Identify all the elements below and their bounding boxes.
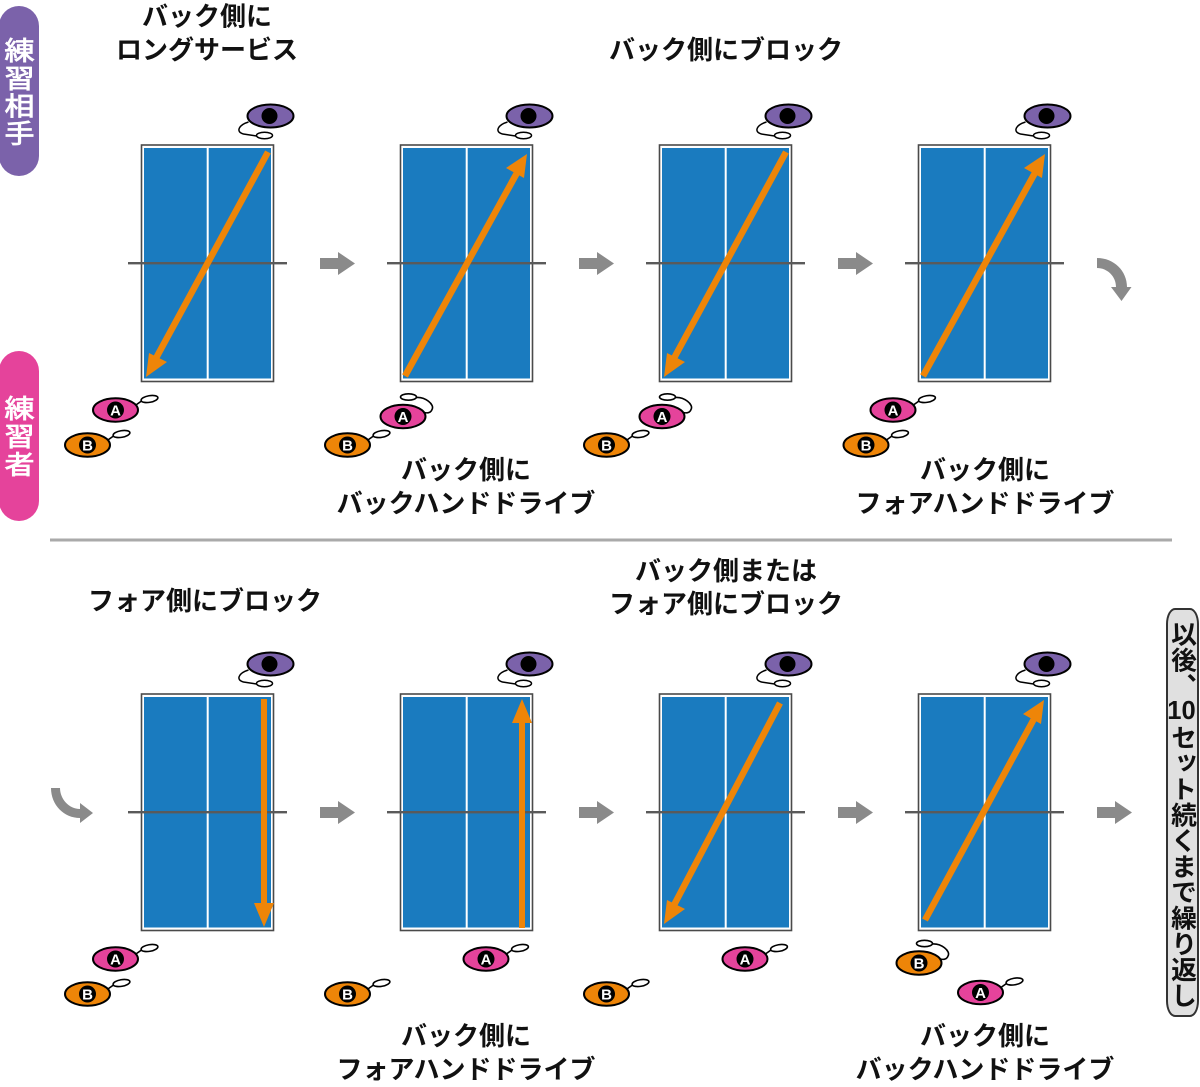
caption: step 8 (856, 1021, 1114, 1084)
icon: opponent (239, 652, 294, 687)
arrow: step 7 to 8 (838, 801, 873, 824)
icon: player A (640, 394, 692, 428)
caption: step 8: バック側に (920, 1021, 1050, 1051)
panel: step 5 forehand block (65, 586, 322, 1006)
icon: player A: A (888, 402, 899, 420)
icon: player A: A (110, 952, 121, 968)
caption: step 2: バック側に (401, 455, 531, 485)
icon: player B (65, 978, 130, 1006)
table: step 4 (905, 145, 1064, 382)
caption: step 6: フォアハンドドライブ (337, 1054, 595, 1084)
heading: step 7 (609, 556, 843, 619)
heading: step 3: バック側にブロック (609, 35, 843, 65)
panel: step 4 forehand drive (844, 104, 1114, 518)
icon: player A: A (975, 985, 986, 1002)
icon: player B: B (82, 986, 93, 1004)
icon: player B: B (861, 438, 872, 454)
caption: step 6: バック側に (401, 1021, 531, 1051)
icon: opponent (757, 104, 812, 139)
icon: player A: A (657, 409, 668, 426)
icon: player A (93, 394, 158, 422)
icon: player B (65, 429, 130, 457)
arrow: step 5 ball path (254, 699, 274, 927)
icon: player B: B (342, 986, 353, 1004)
panel: step 6 forehand drive (325, 652, 595, 1084)
label: practice partner: 手 (5, 120, 34, 149)
heading: step 1 (116, 2, 298, 65)
caption: step 2: バックハンドドライブ (337, 488, 595, 518)
label: practicing player (0, 351, 39, 521)
caption: step 8: バックハンドドライブ (856, 1054, 1114, 1084)
panel: step 8 backhand drive (856, 652, 1114, 1084)
arrow: step 2 to 3 (579, 252, 614, 275)
icon: player B (896, 940, 949, 975)
icon: opponent (757, 652, 812, 687)
icon: player A: A (481, 952, 492, 968)
arrow: step 3 ball path (664, 152, 786, 377)
arrow: step 4 ball path (923, 154, 1045, 376)
heading: step 7: バック側または (635, 556, 817, 586)
panel: step 3 block (584, 35, 843, 457)
arrow: step 8 ball path (925, 700, 1044, 920)
icon: player A (870, 394, 936, 422)
icon: player A (464, 943, 529, 971)
icon: opponent (498, 104, 552, 139)
icon: player B: B (914, 956, 925, 972)
table: step 3 (646, 145, 805, 382)
arrow: step 6 ball path (512, 699, 532, 928)
arrow: step 2 ball path (405, 154, 527, 376)
callout: repeat until 10 sets: 以後、 10 セット続くまで繰り返し (1167, 621, 1196, 1008)
table: step 8 (905, 694, 1064, 930)
icon: opponent (1016, 104, 1070, 139)
label: practicing player: 者 (5, 451, 34, 480)
label: practicing player: 習 (5, 423, 34, 452)
table: step 1 (128, 145, 287, 382)
icon: player A (93, 943, 158, 971)
icon: player A: A (110, 402, 121, 420)
table: step 6 (387, 694, 546, 930)
heading: step 1: バック側に (142, 2, 272, 32)
label: practicing player: 練 (5, 395, 34, 424)
icon: player A: A (740, 952, 751, 968)
icon: player B (325, 429, 390, 457)
icon: player B (325, 978, 390, 1006)
heading: step 1: ロングサービス (116, 35, 298, 65)
icon: player B: B (601, 986, 612, 1004)
icon: player B (584, 429, 649, 457)
panel: step 7 either side block (584, 556, 843, 1006)
heading: step 7: フォア側にブロック (609, 589, 843, 619)
table: step 2 (387, 145, 546, 382)
caption: step 4: フォアハンドドライブ (856, 488, 1114, 518)
label: practice partner: 習 (5, 65, 34, 94)
table: step 5 (128, 694, 287, 930)
arrow: curved turn down (1097, 258, 1132, 301)
icon: player B: B (82, 438, 93, 454)
icon: opponent (1016, 652, 1070, 687)
table: step 7 (646, 694, 805, 930)
caption: step 2 (337, 455, 595, 518)
arrow: curved turn in (51, 788, 93, 823)
caption: step 4: バック側に (920, 455, 1050, 485)
icon: player A: A (398, 409, 409, 426)
label: practice partner: 練 (5, 37, 34, 66)
icon: player B: B (342, 438, 353, 454)
arrow: step 5 to 6 (320, 801, 355, 824)
panel: step 2 backhand drive (325, 104, 595, 518)
label: practice partner: 相 (5, 92, 34, 121)
icon: player B (584, 978, 649, 1006)
arrow: step 1 to 2 (320, 252, 355, 275)
arrow: step 7 ball path (664, 703, 780, 924)
icon: opponent (498, 652, 552, 687)
arrow: step 3 to 4 (838, 252, 873, 275)
icon: player B: B (601, 438, 612, 454)
arrow: to repeat note (1097, 801, 1132, 824)
label: practice partner (0, 6, 39, 176)
arrow: step 6 to 7 (579, 801, 614, 824)
icon: player A (380, 394, 433, 428)
icon: player B (844, 429, 909, 457)
icon: opponent (239, 104, 294, 139)
caption: step 6 (337, 1021, 595, 1084)
arrow: step 1 ball path (146, 152, 268, 377)
icon: player A (722, 943, 788, 971)
panel: step 1 long serve (65, 2, 298, 457)
heading: step 5: フォア側にブロック (88, 586, 322, 616)
icon: player A (958, 977, 1023, 1004)
caption: step 4 (856, 455, 1114, 518)
